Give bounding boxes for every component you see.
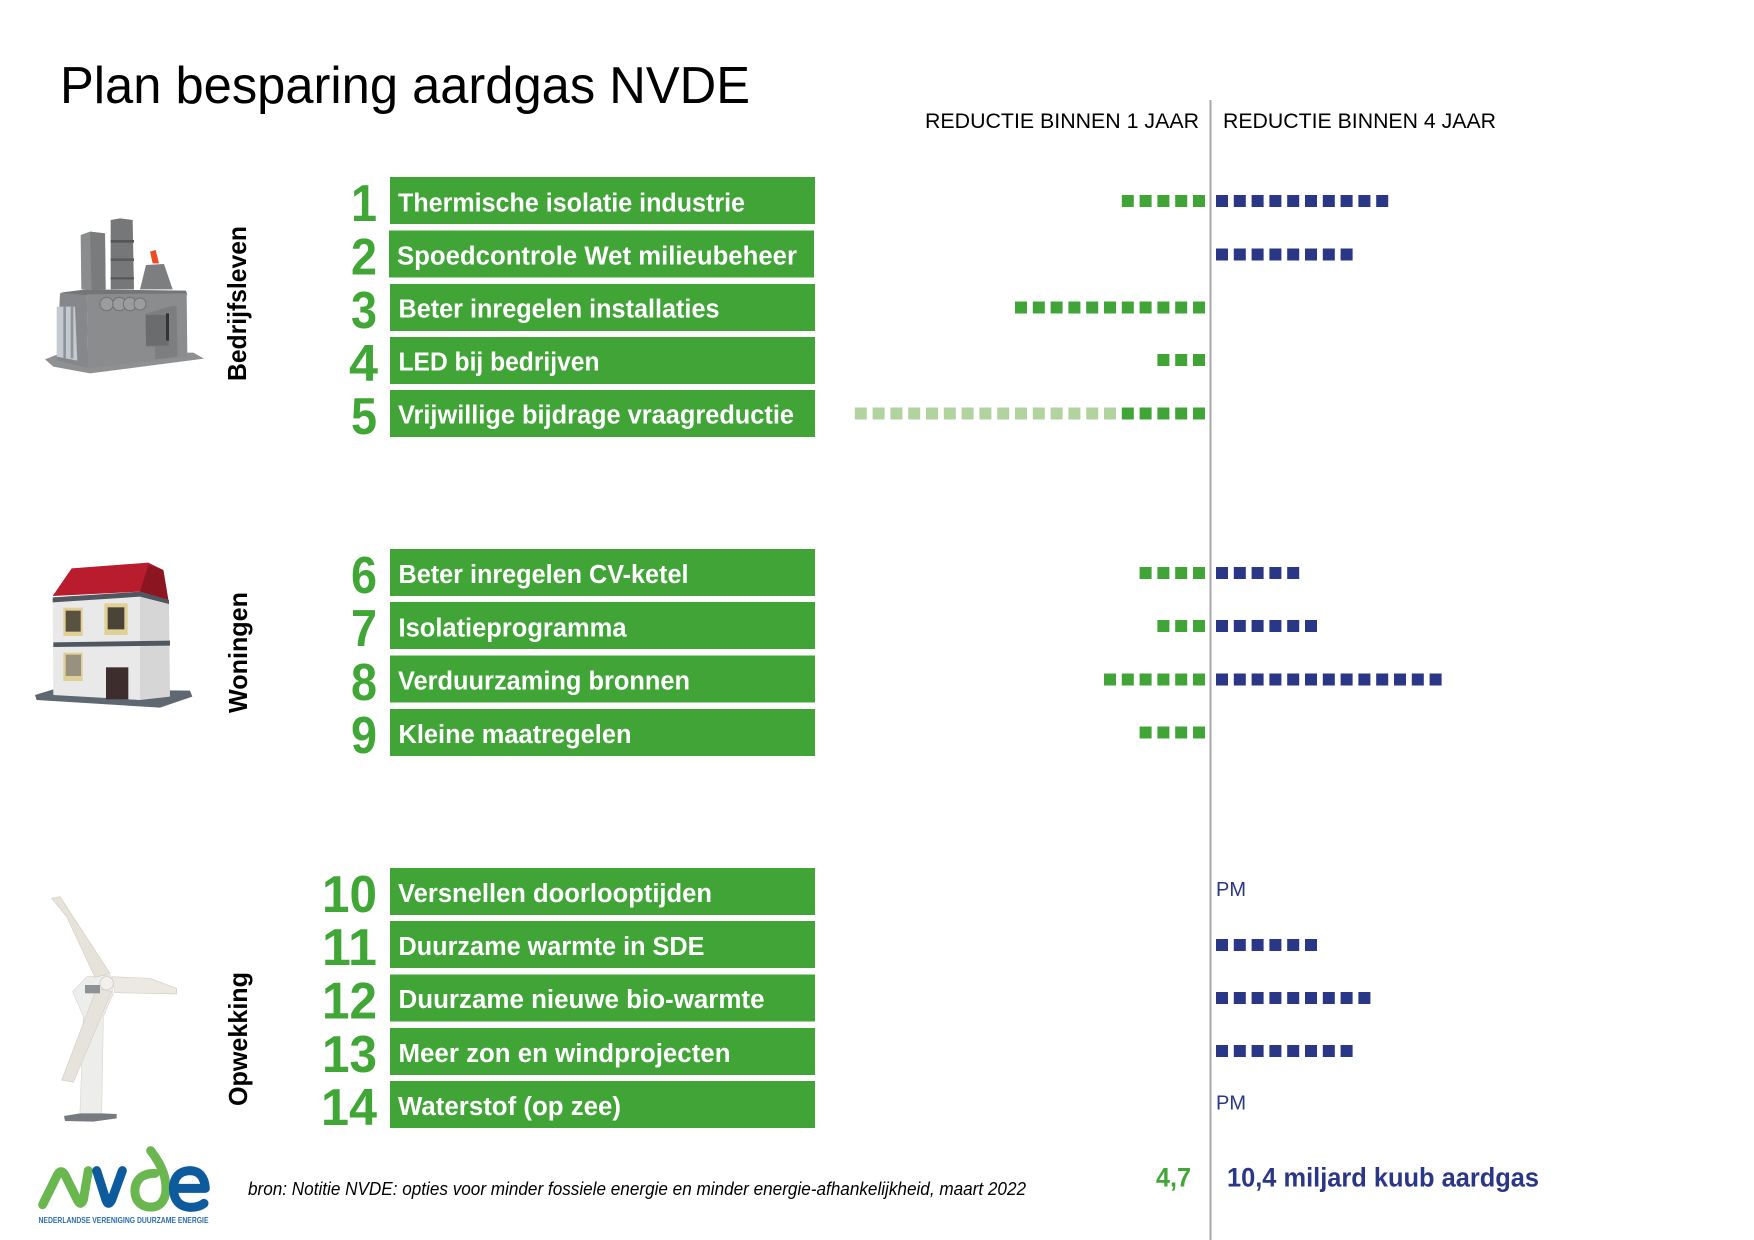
number 11: 11 xyxy=(322,919,377,977)
label: Verduurzaming bronnen: Verduurzaming bronnen xyxy=(398,668,690,696)
label: Meer zon en windprojecten: Meer zon en windprojecten xyxy=(398,1040,730,1068)
bar: Isolatieprogramma xyxy=(390,602,815,649)
bar: Beter inregelen installaties xyxy=(390,284,815,331)
bar: Duurzame nieuwe bio-warmte xyxy=(390,974,815,1022)
1-year squares xyxy=(1122,408,1205,420)
label: Vrijwillige bijdrage vraagreductie: Vrijwillige bijdrage vraagreductie xyxy=(398,402,794,430)
number 10: 10 xyxy=(322,866,377,924)
label: Beter inregelen installaties: Beter inregelen installaties xyxy=(398,296,720,324)
icon: factory xyxy=(45,218,204,373)
4-year squares xyxy=(1216,1045,1353,1057)
label: Versnellen doorlooptijden: Versnellen doorlooptijden xyxy=(398,880,712,908)
number 9: 9 xyxy=(351,707,377,765)
4-year squares xyxy=(1216,620,1317,632)
row 4 xyxy=(349,335,1205,393)
number 12: 12 xyxy=(322,972,377,1030)
logo: NVDE xyxy=(38,1151,209,1225)
4-year squares xyxy=(1216,567,1299,579)
label: Duurzame warmte in SDE: Duurzame warmte in SDE xyxy=(398,933,704,961)
category label: Opwekking: Opwekking xyxy=(223,972,253,1106)
label: Beter inregelen CV-ketel: Beter inregelen CV-ketel xyxy=(398,561,688,589)
bar: Beter inregelen CV-ketel xyxy=(390,549,815,596)
1-year squares xyxy=(1122,195,1205,207)
bar: LED bij bedrijven xyxy=(390,337,815,384)
bar: Kleine maatregelen xyxy=(390,709,815,756)
number 3: 3 xyxy=(351,282,377,340)
label: Isolatieprogramma: Isolatieprogramma xyxy=(398,614,627,642)
number 6: 6 xyxy=(351,547,377,605)
number 5: 5 xyxy=(351,388,377,446)
row 7 xyxy=(351,600,1317,658)
label: LED bij bedrijven: LED bij bedrijven xyxy=(398,348,600,376)
column heading: reduction within 4 years: REDUCTIE BINNEN 4 JAAR xyxy=(1223,110,1496,133)
4-year squares xyxy=(1216,674,1442,686)
4-year squares xyxy=(1216,195,1388,207)
number 8: 8 xyxy=(351,654,377,712)
PM marker: PM xyxy=(1216,1092,1246,1114)
logo tagline: NEDERLANDSE VERENIGING DUURZAME ENERGIE xyxy=(38,1216,209,1225)
bar: Vrijwillige bijdrage vraagreductie xyxy=(390,390,815,437)
total within 4 years: 10,4 miljard kuub aardgas xyxy=(1227,1162,1539,1192)
bar: Spoedcontrole Wet milieubeheer xyxy=(389,230,814,278)
icon: house xyxy=(35,563,192,708)
category label: Woningen: Woningen xyxy=(223,592,253,713)
source note: bron: Notitie NVDE: opties voor minder fossiele energie en minder energie-afhankelijkheid, maart 2022 xyxy=(248,1179,1026,1199)
bar: Thermische isolatie industrie xyxy=(390,177,815,224)
number 7: 7 xyxy=(351,600,377,658)
bar: Verduurzaming bronnen xyxy=(390,656,815,702)
row 6 xyxy=(351,547,1299,605)
1-year squares xyxy=(1104,674,1205,686)
number 2: 2 xyxy=(351,228,377,286)
bar: Waterstof (op zee) xyxy=(390,1081,815,1128)
voluntary 1-year squares (light) xyxy=(855,408,1116,420)
icon: wind turbine xyxy=(52,897,177,1122)
number 1: 1 xyxy=(351,175,377,233)
category label: Bedrijfsleven: Bedrijfsleven xyxy=(222,226,252,381)
row 5 xyxy=(351,388,1205,446)
1-year squares xyxy=(1140,567,1205,579)
number 4: 4 xyxy=(349,335,378,393)
bar: Versnellen doorlooptijden xyxy=(390,868,815,915)
1-year squares xyxy=(1157,354,1205,366)
row 12 xyxy=(322,972,1370,1030)
PM marker: PM xyxy=(1216,879,1246,901)
1-year squares xyxy=(1157,620,1205,632)
vertical axis line xyxy=(1210,100,1212,1240)
title: Plan besparing aardgas NVDE xyxy=(60,57,750,115)
4-year squares xyxy=(1216,248,1353,260)
row 9 xyxy=(351,707,1205,765)
label: Waterstof (op zee): Waterstof (op zee) xyxy=(398,1093,621,1121)
row 3 xyxy=(351,282,1205,340)
1-year squares xyxy=(1015,302,1205,314)
1-year squares xyxy=(1140,726,1205,738)
4-year squares xyxy=(1216,992,1370,1004)
row 14 xyxy=(321,1079,1246,1137)
total within 1 year: 4,7 xyxy=(1156,1162,1191,1192)
label: Spoedcontrole Wet milieubeheer: Spoedcontrole Wet milieubeheer xyxy=(397,242,797,270)
row 2 xyxy=(351,228,1353,286)
number 14: 14 xyxy=(321,1079,377,1137)
row 10 xyxy=(322,866,1246,924)
label: Kleine maatregelen: Kleine maatregelen xyxy=(398,721,632,749)
bar: Duurzame warmte in SDE xyxy=(390,921,815,968)
number 13: 13 xyxy=(322,1026,377,1084)
bar: Meer zon en windprojecten xyxy=(390,1028,815,1075)
column heading: reduction within 1 year: REDUCTIE BINNEN 1 JAAR xyxy=(925,110,1199,133)
logo mark xyxy=(43,1151,205,1207)
row 13 xyxy=(322,1026,1353,1084)
label: Duurzame nieuwe bio-warmte: Duurzame nieuwe bio-warmte xyxy=(398,986,764,1014)
label: Thermische isolatie industrie: Thermische isolatie industrie xyxy=(398,190,745,218)
row 11 xyxy=(322,919,1317,977)
4-year squares xyxy=(1216,939,1317,951)
row 1 xyxy=(351,175,1388,233)
row 8 xyxy=(351,654,1442,712)
